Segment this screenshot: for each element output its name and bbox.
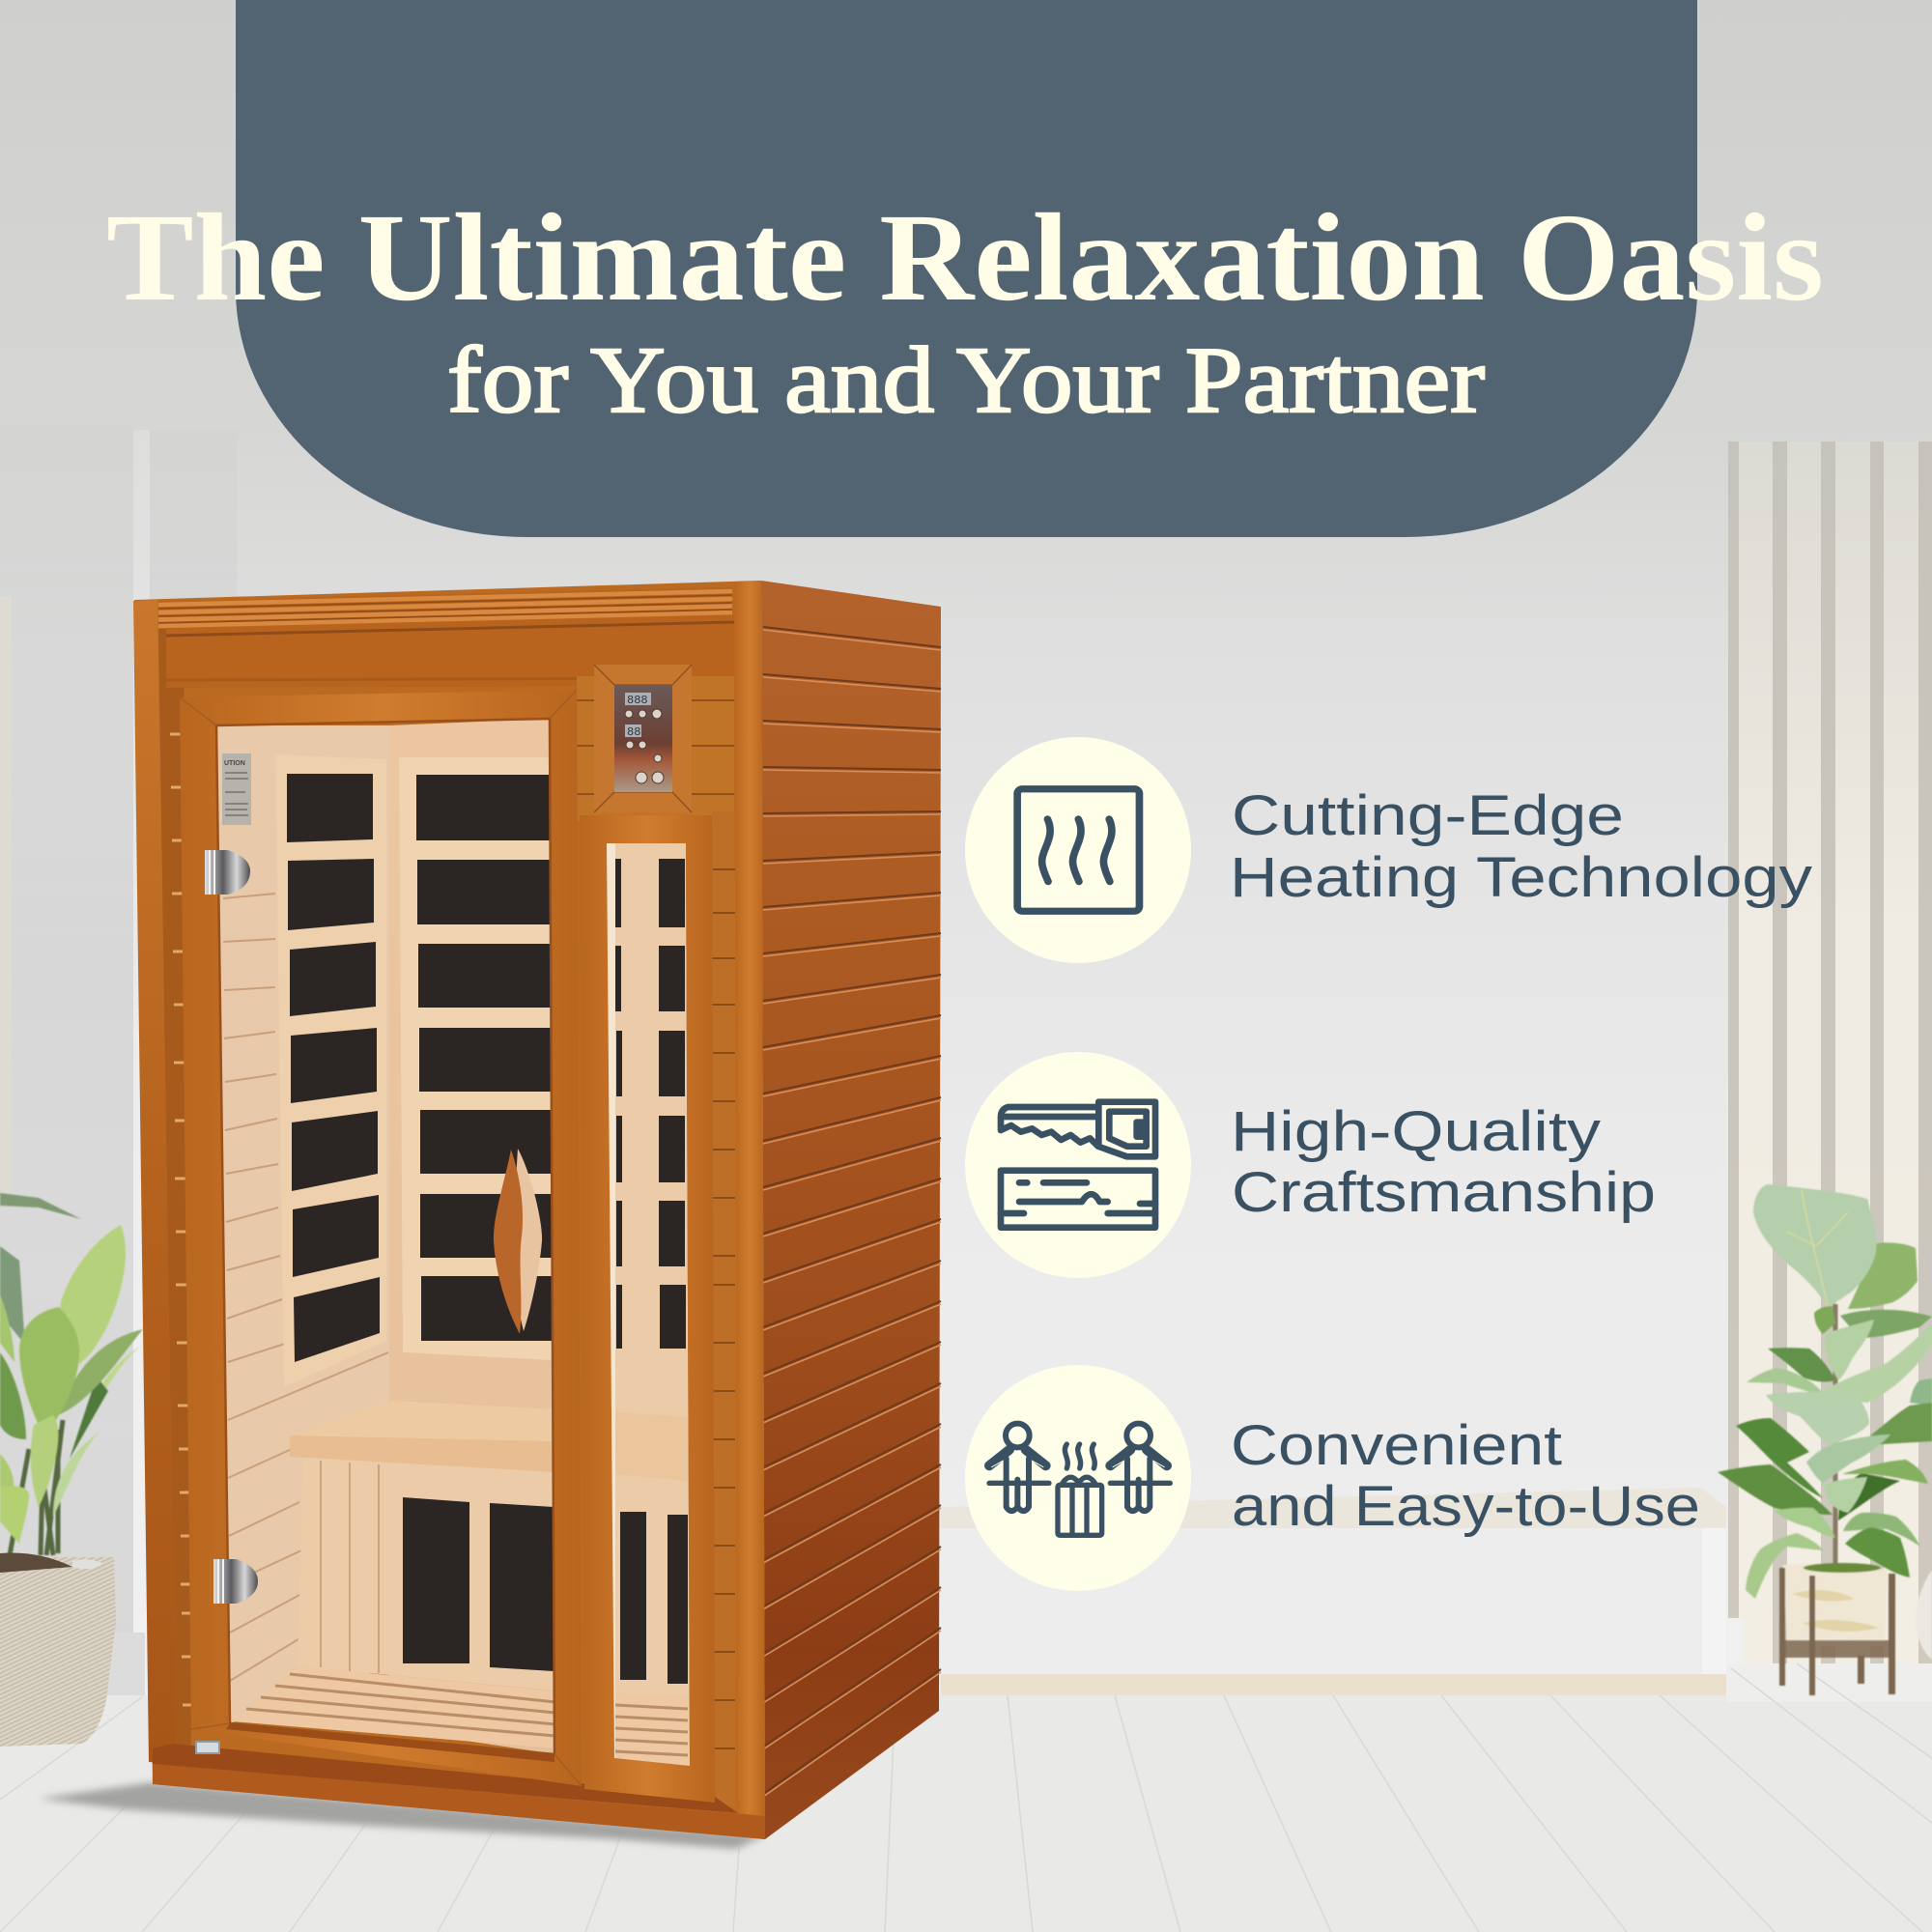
- text: convenient: Convenient: [1231, 1414, 1562, 1477]
- door handle: [494, 1149, 542, 1334]
- sticker: UTION: [224, 760, 245, 767]
- sauna cornice: [158, 587, 733, 629]
- plant pot stand back: [1858, 1656, 1864, 1684]
- plant stem: [1833, 1304, 1837, 1565]
- top hinge: [205, 850, 250, 895]
- text: craftsmanship: High-Quality: [1231, 1100, 1601, 1163]
- sauna: [133, 581, 941, 1839]
- digital displays: 888: [627, 694, 648, 707]
- bottom hinge: [213, 1559, 258, 1604]
- white vase: [1916, 1570, 1932, 1660]
- left wall carbon panels: [287, 774, 380, 1362]
- plant pot: [1783, 1563, 1888, 1647]
- right wall slats: [1728, 441, 1932, 1663]
- sauna left post: [133, 600, 176, 1764]
- icon circle 3: [965, 1365, 1191, 1591]
- sauna left slatted strip: [158, 628, 192, 1768]
- icon circle 1: [965, 737, 1191, 963]
- icon circle 2: [965, 1052, 1191, 1278]
- interior left wall: [216, 725, 389, 1723]
- text: heating: Cutting-Edge: [1232, 784, 1624, 847]
- sauna recess above base: [153, 1744, 738, 1813]
- window panels: [615, 859, 688, 1684]
- left plant: [0, 1193, 143, 1555]
- side window interior: [607, 843, 690, 1766]
- bench: [290, 1401, 555, 1472]
- icon: people in sauna: [989, 1424, 1170, 1535]
- feature 1: heating: [965, 737, 1812, 963]
- feature 3: convenient: [965, 1365, 1700, 1591]
- text: heating: [1230, 784, 1812, 909]
- side window frame: [580, 815, 715, 1803]
- icon: saw and plank: [1001, 1102, 1155, 1228]
- sauna front body: [134, 581, 765, 1839]
- left wall heater frame: [275, 754, 386, 1387]
- door interior: [216, 719, 555, 1754]
- under bench wall: [298, 1454, 555, 1690]
- sauna side panel: [761, 581, 941, 1839]
- left plant woven pot: [0, 1553, 116, 1747]
- text: craftsmanship: Craftsmanship: [1232, 1161, 1656, 1224]
- subtitle: for You and Your Partner: [447, 328, 1485, 432]
- shadow under sauna: [39, 1782, 765, 1849]
- text: heating: Heating Technology: [1230, 846, 1812, 909]
- icon: heating panel: [1017, 789, 1139, 911]
- feature 2: craftsmanship: [965, 1052, 1656, 1278]
- window floor slats: [615, 1693, 688, 1766]
- floor slats: [232, 1666, 555, 1748]
- sticker: [222, 753, 251, 825]
- plant leaves: [1718, 1184, 1932, 1599]
- interior back wall: [389, 719, 555, 1754]
- control buttons: [625, 709, 664, 783]
- digital displays: [625, 693, 651, 739]
- sauna right plank strip: [577, 676, 736, 1806]
- control panel: [594, 665, 692, 812]
- right plant: [1718, 1184, 1932, 1695]
- door rating label: [195, 1741, 220, 1754]
- header panel: [236, 0, 1697, 537]
- digital displays: 88: [627, 725, 640, 739]
- floor: [0, 1663, 1932, 1932]
- text: convenient: and Easy-to-Use: [1232, 1475, 1700, 1538]
- plant stand: [1779, 1568, 1895, 1695]
- sauna header board: [166, 615, 734, 688]
- under bench carbon panels: [403, 1497, 554, 1671]
- title: The Ultimate Relaxation Oasis: [106, 188, 1824, 327]
- left wall column: [0, 426, 237, 1696]
- sauna right post: [734, 581, 765, 1816]
- sauna base plinth: [153, 1764, 765, 1839]
- window bench: [615, 1412, 688, 1481]
- back wall heater frame: [399, 757, 553, 1360]
- back wall carbon panels: [416, 775, 554, 1341]
- door inner edge highlight: [226, 1723, 554, 1762]
- cabinet behind sauna: [941, 1488, 1744, 1695]
- door frame: [180, 690, 582, 1786]
- text: convenient: [1231, 1414, 1700, 1538]
- text: craftsmanship: [1231, 1100, 1656, 1224]
